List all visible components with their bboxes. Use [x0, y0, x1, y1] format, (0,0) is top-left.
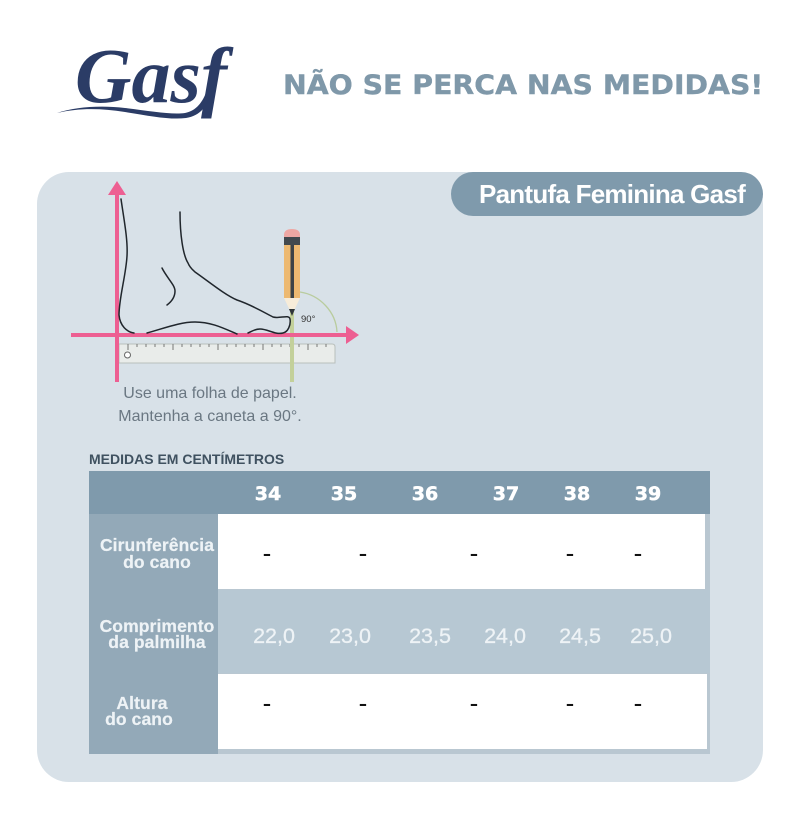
values row 3: - — [566, 688, 574, 718]
values row 2: 23,0 — [329, 624, 371, 648]
size 39: 39 — [635, 483, 661, 505]
measuring diagram — [71, 181, 359, 382]
label: circunferência do cano — [100, 535, 214, 572]
values row 2: 24,5 — [559, 624, 601, 648]
panel: background — [37, 172, 763, 782]
values row 2: 22,0 — [253, 624, 295, 648]
values row 3: - — [634, 688, 642, 718]
title: NÃO SE PERCA NAS MEDIDAS! — [283, 70, 763, 101]
instruction text — [118, 385, 302, 425]
row: circunferência — [218, 514, 705, 589]
values row 2: 23,5 — [409, 624, 451, 648]
green vertical guide — [290, 312, 294, 382]
foot outline — [119, 199, 290, 334]
size 38: 38 — [564, 483, 590, 505]
90 degree label: 90° — [301, 314, 316, 325]
label: altura do cano: do cano — [105, 709, 173, 729]
row label column — [89, 514, 218, 754]
label: altura do cano: Altura — [116, 693, 168, 713]
size 37: 37 — [493, 483, 519, 505]
instruction text: Use uma folha de papel. — [123, 385, 297, 402]
table heading: MEDIDAS EM CENTÍMETROS — [89, 451, 284, 467]
label: comprimento da palmilha: Comprimento — [100, 616, 214, 636]
label: comprimento da palmilha — [100, 616, 214, 652]
values row 2: 24,0 — [484, 624, 526, 648]
product label pill: Pantufa Feminina Gasf — [479, 179, 745, 209]
pencil — [284, 229, 300, 316]
values row 1: - — [470, 538, 478, 568]
size 35: 35 — [331, 483, 357, 505]
label: comprimento da palmilha: da palmilha — [108, 632, 206, 652]
logo: Gasf: Gasf — [75, 32, 234, 119]
row: altura — [218, 674, 707, 749]
row: comprimento — [218, 590, 710, 673]
product label pill — [451, 172, 763, 216]
values row 1: - — [359, 538, 367, 568]
pink axes — [71, 181, 359, 382]
values row 3: - — [470, 688, 478, 718]
values row 1 — [263, 538, 642, 568]
label: altura do cano — [105, 693, 173, 729]
label: circunferência do cano: do cano — [123, 552, 191, 572]
size 34: 34 — [255, 483, 281, 505]
size 36: 36 — [412, 483, 438, 505]
angle arc — [300, 292, 337, 332]
values row 3 — [263, 688, 642, 718]
ruler — [119, 344, 335, 363]
values row 1: - — [263, 538, 271, 568]
table header row — [89, 471, 710, 514]
table — [89, 471, 710, 754]
values row 3: - — [359, 688, 367, 718]
label: circunferência do cano: Cirunferência — [100, 535, 214, 555]
values row 2: 25,0 — [630, 624, 672, 648]
values row 3: - — [263, 688, 271, 718]
values row 1: - — [566, 538, 574, 568]
values row 1: - — [634, 538, 642, 568]
instruction text: Mantenha a caneta a 90°. — [118, 408, 302, 425]
